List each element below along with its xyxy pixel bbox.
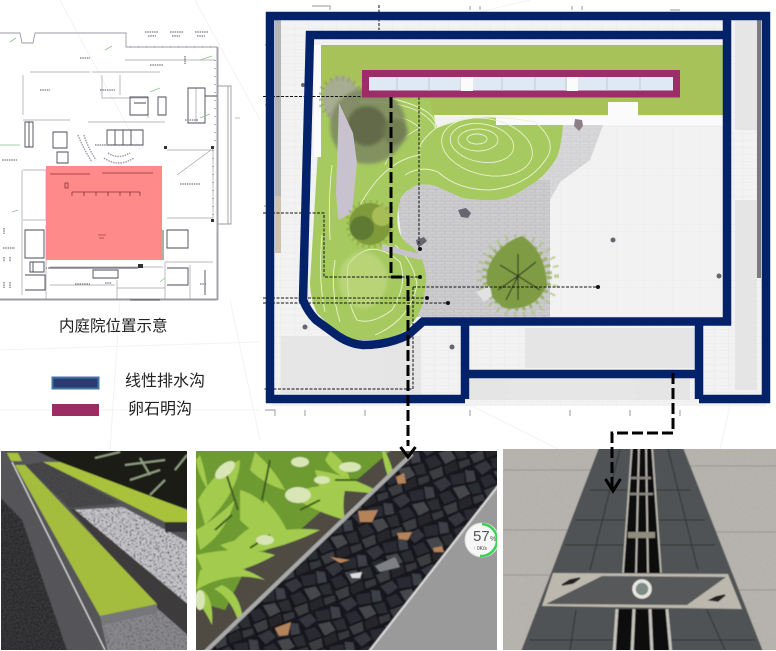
lower gravel	[102, 608, 190, 651]
shadow	[0, 495, 68, 651]
caption: courtyard location: 内庭院位置示意	[59, 316, 168, 335]
speed widget: %	[490, 536, 496, 543]
thin dashed leader lines	[263, 5, 598, 389]
pebble ditch	[366, 74, 676, 94]
legend label: linear drain: 线性排水沟	[125, 372, 205, 390]
large tree canopy	[330, 88, 408, 164]
paver joints	[530, 449, 755, 650]
pavement grain	[499, 445, 776, 651]
lawn contour lines	[321, 98, 550, 335]
dark paver band	[520, 445, 764, 651]
upper green strip	[43, 462, 190, 523]
variegated leaves	[195, 457, 361, 610]
upper strip front	[165, 522, 190, 532]
light gravel	[72, 507, 190, 606]
left and right edge strips	[275, 20, 761, 278]
tick marks around plan	[264, 6, 680, 416]
leader end dots	[418, 247, 600, 305]
legend	[52, 372, 205, 418]
lawn	[310, 100, 563, 340]
speed widget: 57	[473, 528, 490, 545]
bush	[347, 201, 393, 247]
dark paving fade	[520, 125, 603, 200]
people markers	[301, 83, 722, 350]
tree	[476, 236, 557, 315]
stone path lower	[382, 244, 421, 260]
speed widget	[465, 523, 499, 557]
lower lawn highlight	[339, 252, 387, 308]
floor plan tick marks	[46, 47, 215, 268]
courtyard highlight	[46, 166, 162, 260]
metal edge left	[203, 454, 412, 651]
white left edge	[314, 45, 321, 157]
linear drain network	[270, 12, 766, 399]
concrete	[367, 482, 501, 651]
paving	[272, 14, 766, 406]
pavement	[499, 445, 776, 651]
stones bed	[203, 447, 501, 651]
metal edge lower	[70, 509, 190, 637]
floor plan with courtyard location	[0, 32, 240, 300]
small far green patch	[7, 453, 22, 461]
photo base gravel	[0, 448, 190, 651]
pavement joints	[503, 466, 776, 590]
outer drain	[270, 16, 766, 399]
top lawn	[321, 45, 723, 115]
arrow: pebble ditch to photo	[391, 97, 416, 457]
grey shrub	[320, 76, 360, 124]
plate handles	[562, 578, 725, 601]
white band	[496, 102, 723, 125]
cover plate	[542, 573, 742, 609]
inner drain	[303, 12, 727, 345]
floor plan dark core walls	[25, 88, 217, 300]
floor plan thin room lines	[22, 60, 215, 300]
floor plan outline	[0, 33, 231, 300]
lower drain branch	[465, 322, 699, 399]
white edge line	[12, 462, 105, 650]
plant mass	[192, 447, 395, 610]
dark leaf gaps	[215, 460, 360, 548]
photo: pebble ditch close-up	[192, 447, 501, 651]
arrow: linear drain to photo	[606, 373, 673, 491]
speed widget: ↑ 0K/s	[473, 546, 487, 552]
floor plan stair arcs	[78, 135, 134, 163]
floor plan tiny labels	[2, 32, 208, 288]
legend swatch: linear drain	[52, 378, 98, 388]
dark paving zone	[395, 180, 550, 317]
foliage	[36, 451, 187, 510]
photo: lawn strips and gravel	[0, 448, 190, 651]
cover plate inner panel	[546, 576, 726, 605]
dead leaves on stones	[275, 473, 444, 636]
drain channel upper	[623, 445, 662, 573]
floor plan green annotations	[0, 38, 240, 282]
photo: linear drain channel	[499, 445, 776, 651]
inner courtyard paving	[314, 39, 723, 317]
strip front edge	[100, 604, 157, 625]
metal edge right	[367, 482, 501, 651]
legend swatch: pebble ditch	[52, 404, 99, 416]
drain channel lower	[613, 609, 672, 651]
stone path upper	[336, 103, 357, 220]
plant leaves	[196, 451, 395, 640]
plate ring	[634, 581, 650, 597]
paving shaded patches	[281, 20, 757, 400]
main green strip	[15, 465, 157, 616]
site plan	[263, 5, 766, 416]
floor plan column dots	[138, 146, 214, 268]
soil	[196, 451, 414, 650]
pale stones	[375, 557, 400, 572]
dark gravel band	[25, 462, 120, 508]
foliage fronds	[95, 452, 187, 495]
legend label: pebble ditch: 卵石明沟	[128, 400, 192, 418]
